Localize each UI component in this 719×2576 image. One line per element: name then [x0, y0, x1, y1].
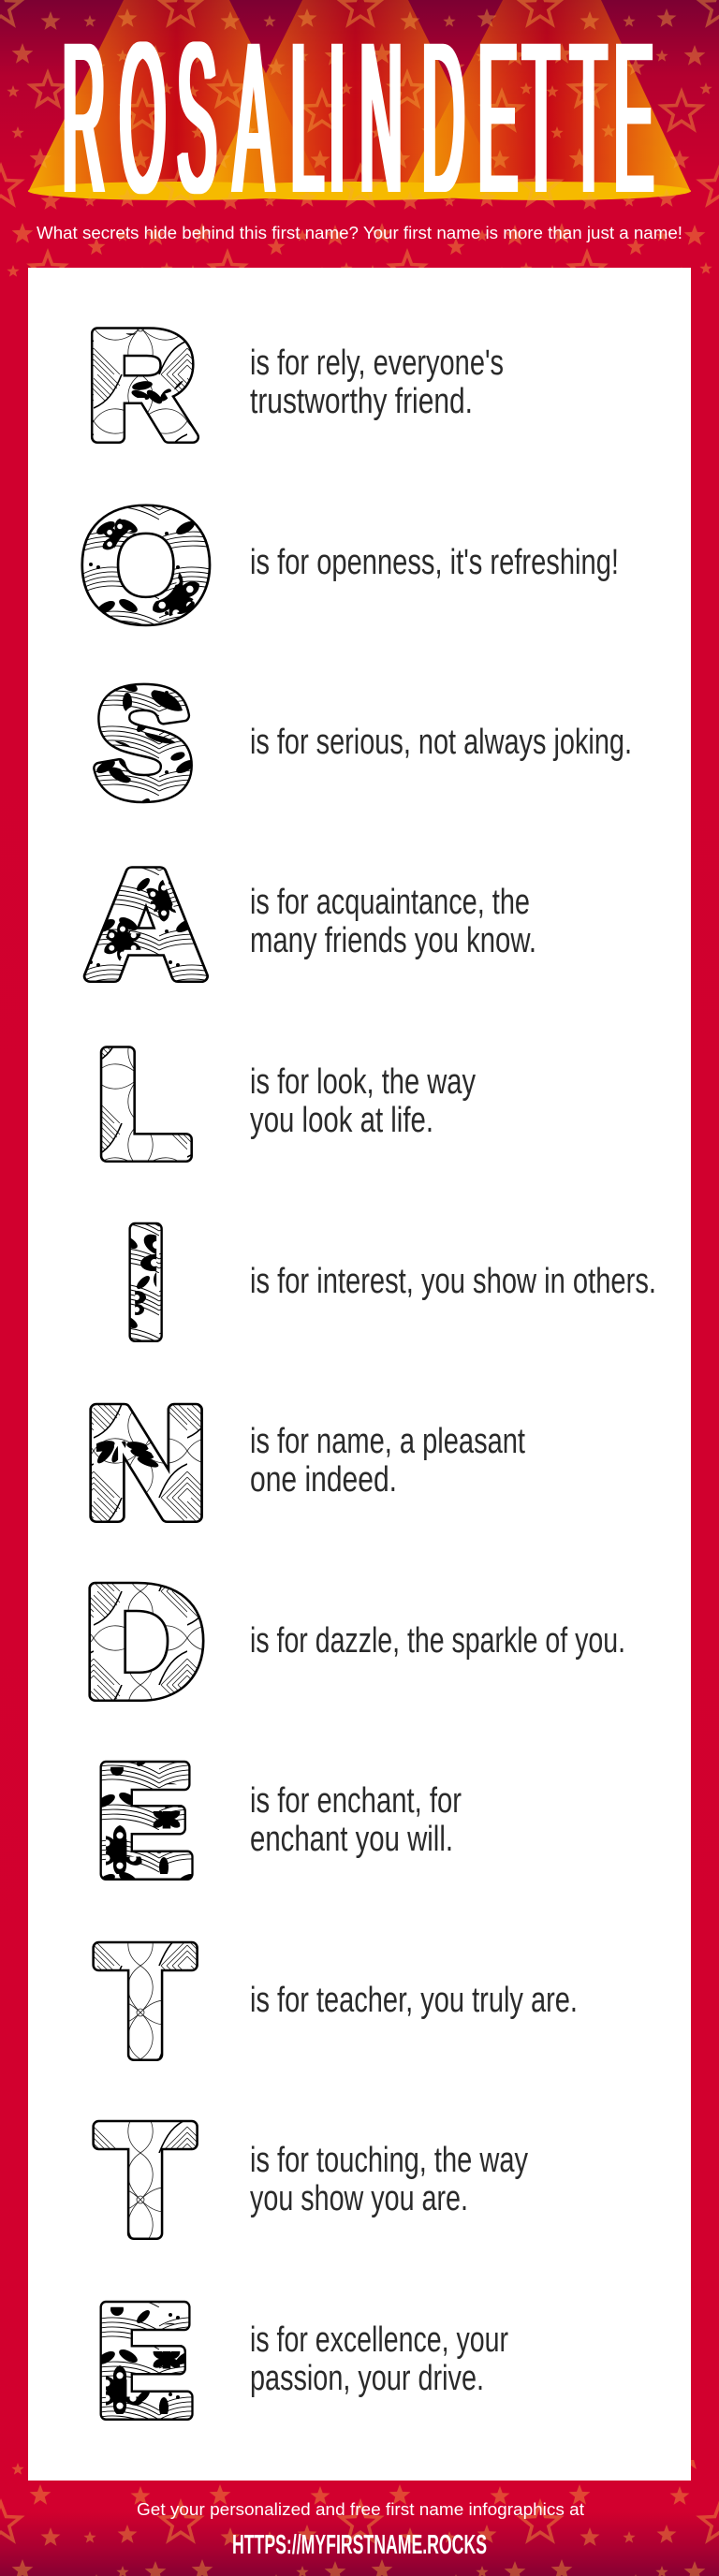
icon: doodle letter A: A — [86, 841, 206, 1009]
text: N meaning — [250, 1422, 525, 1500]
text: R meaning: trustworthy friend. — [250, 382, 473, 421]
icon: doodle letter S — [93, 683, 193, 803]
icon: doodle letter D: D — [84, 1556, 204, 1729]
icon: doodle letter I: I — [125, 1196, 167, 1369]
icon: doodle letter R — [90, 327, 200, 444]
icon: doodle letter R: R — [87, 301, 196, 470]
row: I — [125, 1196, 656, 1369]
icon: doodle letter L: L — [96, 1020, 191, 1189]
text: L meaning — [250, 1062, 476, 1140]
row: R — [87, 301, 504, 470]
icon: doodle letter E: E — [96, 2275, 193, 2448]
icon: doodle letter O: O — [81, 479, 211, 651]
icon: doodle letter E: E — [96, 1734, 193, 1908]
icon: doodle letter E: E — [96, 1734, 193, 1908]
text: N meaning: is for name, a pleasant — [250, 1422, 525, 1461]
text: second T meaning: is for touching, the way — [250, 2141, 528, 2180]
icon: doodle letter N: N — [85, 1377, 208, 1550]
text: E meaning — [250, 1781, 462, 1859]
row: D — [84, 1556, 625, 1729]
icon: doodle letter R: R — [87, 301, 196, 470]
text: L meaning: you look at life. — [250, 1101, 433, 1140]
text: O meaning: is for openness, it's refreshing! — [250, 543, 619, 582]
icon: doodle letter N: N — [85, 1377, 208, 1550]
icon: doodle letter S: S — [95, 659, 192, 828]
icon: doodle letter O — [81, 504, 212, 627]
text: A meaning: is for acquaintance, the — [250, 883, 530, 922]
icon: doodle letter E — [99, 1760, 194, 1881]
title: ROSALINDETTE — [63, 0, 653, 238]
icon: doodle letter N — [89, 1402, 203, 1523]
icon: doodle letter A — [82, 866, 210, 983]
row: L — [96, 1020, 476, 1189]
icon: doodle letter S: S — [95, 659, 192, 828]
spotlights — [28, 0, 691, 200]
text: R meaning: is for rely, everyone's — [250, 344, 504, 383]
icon: doodle letter O: O — [81, 479, 211, 651]
icon: doodle letter T: T — [97, 2094, 194, 2267]
row: O — [81, 479, 619, 651]
text: second T meaning — [250, 2141, 528, 2218]
icon: doodle letter L: L — [96, 1020, 191, 1189]
text: E meaning: enchant you will. — [250, 1820, 453, 1859]
row: S — [95, 659, 632, 828]
row: last E — [99, 2301, 508, 2421]
footer invitation text: Get your personalized and free first name infographics at — [137, 2500, 584, 2519]
icon: doodle letter T: T — [97, 2094, 194, 2267]
row: N — [85, 1377, 525, 1550]
icon: doodle letter T: T — [97, 1915, 194, 2088]
footer stars — [0, 2460, 719, 2576]
text: last E meaning: passion, your drive. — [250, 2359, 484, 2398]
icon: doodle letter D: D — [84, 1556, 204, 1729]
row: E — [96, 1734, 462, 1908]
icon: doodle letter A: A — [86, 841, 206, 1009]
footer url: HTTPS://MYFIRSTNAME.ROCKS — [232, 2530, 487, 2560]
row: A — [86, 841, 536, 1009]
icon: doodle letter E — [99, 2301, 194, 2421]
text: A meaning — [250, 883, 536, 960]
text: N meaning: one indeed. — [250, 1460, 397, 1500]
text: last E meaning: is for excellence, your — [250, 2320, 508, 2360]
text: R meaning — [250, 344, 504, 421]
subtitle: What secrets hide behind this first name? Your first name is more than just a name! — [37, 224, 682, 242]
icon: doodle letter E: E — [96, 2275, 193, 2448]
text: last E meaning — [250, 2320, 508, 2398]
panel: white content card — [28, 268, 691, 2481]
text: E meaning: is for enchant, for — [250, 1781, 462, 1821]
row: T — [97, 1915, 578, 2088]
text: second T meaning: you show you are. — [250, 2179, 468, 2218]
text: L meaning: is for look, the way — [250, 1062, 476, 1102]
icon: doodle letter I — [128, 1222, 163, 1342]
text: T meaning: is for teacher, you truly are. — [250, 1981, 578, 2020]
icon: doodle letter I: I — [125, 1196, 167, 1369]
row: second T — [97, 2094, 528, 2267]
text: A meaning: many friends you know. — [250, 921, 536, 960]
header stars — [0, 0, 719, 284]
icon: doodle letter T: T — [97, 1915, 194, 2088]
